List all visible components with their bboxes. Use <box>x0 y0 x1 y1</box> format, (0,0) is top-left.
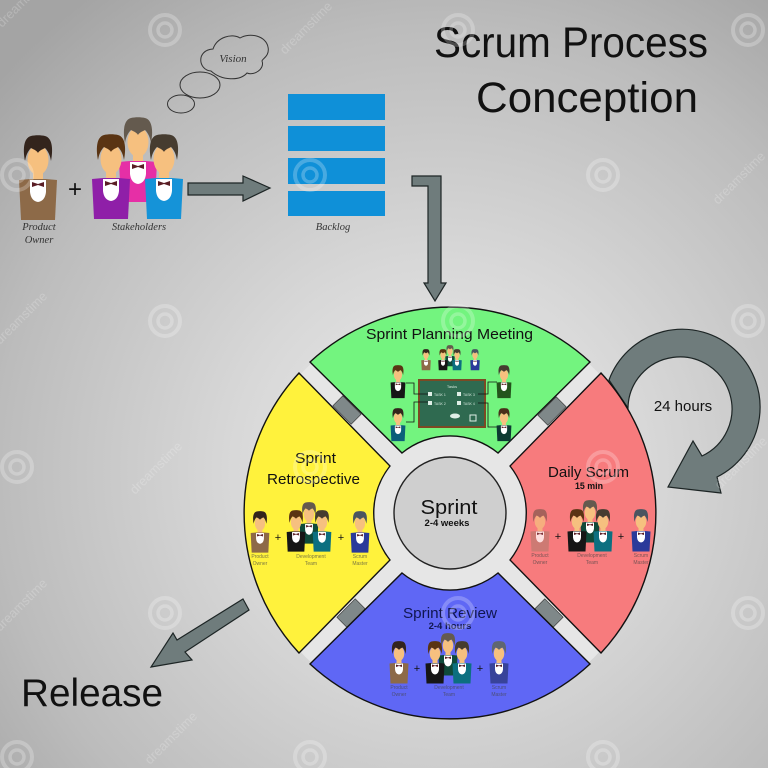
vision thought cloud: Vision <box>219 53 247 65</box>
plus sign: + <box>68 176 82 203</box>
daily scrum attendees: Scrum <box>634 553 648 559</box>
panel: sprint retrospective: Sprint <box>295 450 337 467</box>
planning attendees row <box>421 345 480 370</box>
watermark: dreamstime <box>277 0 335 57</box>
product owner: Product <box>21 222 57 233</box>
sprint review attendees: + <box>414 663 420 675</box>
watermark: dreamstime <box>710 148 768 207</box>
daily scrum attendees: Team <box>586 560 598 566</box>
task board: TASK 3 <box>463 393 475 397</box>
task board: TASK 4 <box>463 402 475 406</box>
daily scrum attendees: + <box>555 531 561 543</box>
title <box>434 19 708 122</box>
task board <box>419 380 485 427</box>
watermark: dreamstime <box>127 438 185 497</box>
watermark: dreamstime <box>142 708 200 767</box>
task board: Tasks <box>447 384 457 389</box>
arrow: backlog to sprint planning <box>412 176 446 301</box>
sprint review attendees: Scrum <box>492 685 506 691</box>
panel: daily scrum: Daily Scrum <box>548 464 629 481</box>
daily scrum attendees: Development <box>577 553 607 559</box>
backlog <box>288 94 385 233</box>
developers around board <box>391 365 511 441</box>
arrow: to release <box>151 599 249 667</box>
retrospective attendees: Team <box>305 561 317 567</box>
product owner <box>19 135 57 246</box>
connector: planning to daily <box>538 397 566 425</box>
panel: sprint planning meeting <box>310 307 590 453</box>
retrospective attendees: Master <box>352 561 368 567</box>
arrow: 24 hours loop <box>609 329 760 493</box>
stakeholders: Stakeholders <box>112 222 166 233</box>
retrospective attendees: + <box>338 532 344 544</box>
title: Scrum Process <box>434 19 708 67</box>
sprint hub: Sprint <box>420 497 478 519</box>
sprint review attendees: Product <box>390 685 408 691</box>
vision thought cloud <box>168 35 268 113</box>
retrospective attendees <box>251 502 369 567</box>
sprint review attendees: Development <box>434 685 464 691</box>
arrow: to backlog <box>188 176 270 201</box>
sprint hub: 2-4 weeks <box>425 518 469 529</box>
daily scrum attendees: Master <box>633 560 649 566</box>
label: 24 hours: 24 hours <box>654 398 712 415</box>
sprint hub <box>394 457 506 569</box>
panel: sprint planning meeting: Sprint Planning Meeting <box>366 326 533 343</box>
daily scrum attendees: Product <box>531 553 549 559</box>
task board: TASK 1 <box>434 393 446 397</box>
stakeholders <box>92 117 183 233</box>
retrospective attendees: Scrum <box>353 554 367 560</box>
connector: review to retrospective <box>337 599 365 627</box>
panel: daily scrum: 15 min <box>575 481 603 492</box>
retrospective attendees: + <box>275 532 281 544</box>
panel: sprint review <box>310 573 590 719</box>
daily scrum attendees: + <box>618 531 624 543</box>
connector: retrospective to planning <box>333 396 361 424</box>
panel: daily scrum <box>510 373 656 653</box>
daily scrum attendees: Owner <box>533 560 548 566</box>
daily scrum attendees <box>530 500 650 566</box>
connector: daily to review <box>535 599 563 627</box>
retrospective attendees: Owner <box>253 561 268 567</box>
sprint review attendees: + <box>477 663 483 675</box>
sprint review attendees: Master <box>491 692 507 698</box>
release label: Release <box>21 672 163 715</box>
product owner: Owner <box>25 235 54 246</box>
panel: sprint retrospective <box>244 373 390 653</box>
backlog: Backlog <box>316 222 350 233</box>
title: Conception <box>476 74 698 122</box>
retrospective attendees: Development <box>296 554 326 560</box>
task board: TASK 2 <box>434 402 446 406</box>
sprint review attendees: Owner <box>392 692 407 698</box>
panel: sprint retrospective: Retrospective <box>267 471 360 488</box>
panel: sprint review: 2-4 hours <box>429 621 471 632</box>
sprint cycle disc <box>246 309 654 717</box>
panel: sprint review: Sprint Review <box>403 605 497 622</box>
sprint review attendees <box>390 633 508 698</box>
sprint review attendees: Team <box>443 692 455 698</box>
retrospective attendees: Product <box>251 554 269 560</box>
